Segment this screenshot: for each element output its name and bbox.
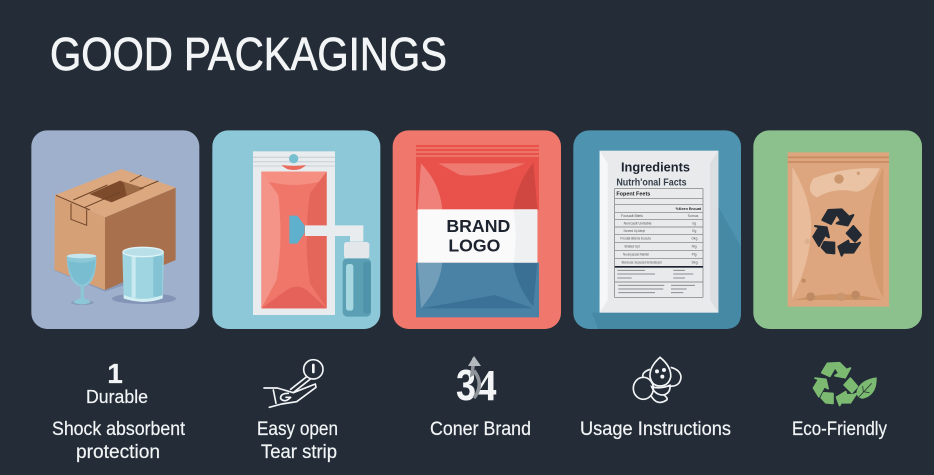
label: easy open: Easy open: [257, 419, 338, 440]
brand logo text: LOGO: [448, 235, 500, 255]
nutrition table: Fousadt Bitels: [621, 214, 643, 218]
panel: easy open tear strip pouch: [212, 130, 380, 329]
label: eco-friendly: Eco-Friendly: [792, 419, 887, 440]
water tumbler: [112, 247, 176, 304]
label: durable: protection: [76, 442, 160, 463]
nutrition table: 0g: [692, 221, 696, 225]
nutrition table: Blanouse Supused Entesidepst: [622, 260, 662, 264]
nutrition table: Okg: [691, 236, 698, 240]
nutrition table: Pig: [692, 252, 697, 256]
nutrition table: Dkg: [692, 260, 698, 264]
panel: durable box and glasses: [31, 130, 199, 329]
nutrition table: Sbiated Upt: [624, 244, 640, 248]
ingredients heading: Ingredients: [621, 160, 690, 175]
panel: brand logo bag: [393, 130, 561, 329]
icon: numbers with arrows: 4: [476, 361, 497, 410]
cardboard box: [53, 169, 176, 292]
nutrition table: Noneed Up Adept: [624, 229, 645, 233]
title: GOOD PACKAGINGS: [50, 28, 447, 80]
nutrition table: Nounpacsal Rabitel: [623, 252, 649, 256]
label: easy open: [257, 419, 338, 463]
panel: eco-friendly kraft bag: [753, 130, 922, 329]
icon: usage instructions outline: [633, 357, 681, 402]
spray bottle and nozzle: [289, 216, 371, 317]
icon: numbers with arrows: 3: [456, 361, 476, 410]
icon: recycle symbol: [813, 209, 861, 256]
nutritional facts heading: Nutrh'onal Facts: [616, 178, 687, 189]
nutrition table: Nig: [692, 244, 697, 248]
icon: hand with tear tab: [264, 360, 323, 407]
nutrition table: [615, 189, 703, 297]
label: usage instructions: Usage Instructions: [580, 419, 731, 440]
nutrition table: Fnodat Bitens Eucuto: [620, 236, 651, 240]
icon: green recycle with leaf: [814, 363, 877, 405]
brand logo text: [446, 216, 510, 255]
nutrition table: Somus: [688, 214, 699, 218]
nutrition table: %Keen Encuat: [676, 207, 702, 211]
panel: ingredients packet: [573, 130, 741, 329]
white pouch with tear strip: [253, 151, 335, 315]
brand logo text: BRAND: [446, 216, 510, 236]
label: easy open: Tear strip: [261, 442, 337, 463]
label: durable: Durable: [86, 386, 148, 407]
wine glass: [67, 254, 96, 305]
bag: [416, 145, 539, 317]
nutrition table: Eg: [692, 229, 697, 233]
nutrition table: Noncasit Unitable: [624, 221, 652, 225]
nutrition table: Fopent Feets: [616, 192, 650, 198]
label: durable: Shock absorbent: [52, 419, 186, 440]
icon: numbers with arrows: [456, 356, 497, 410]
label: durable: 1: [107, 358, 123, 389]
label: durable: [52, 358, 186, 463]
label: coner brand: Coner Brand: [430, 419, 531, 440]
kraft bag: [788, 152, 889, 307]
white packet: [600, 151, 718, 313]
